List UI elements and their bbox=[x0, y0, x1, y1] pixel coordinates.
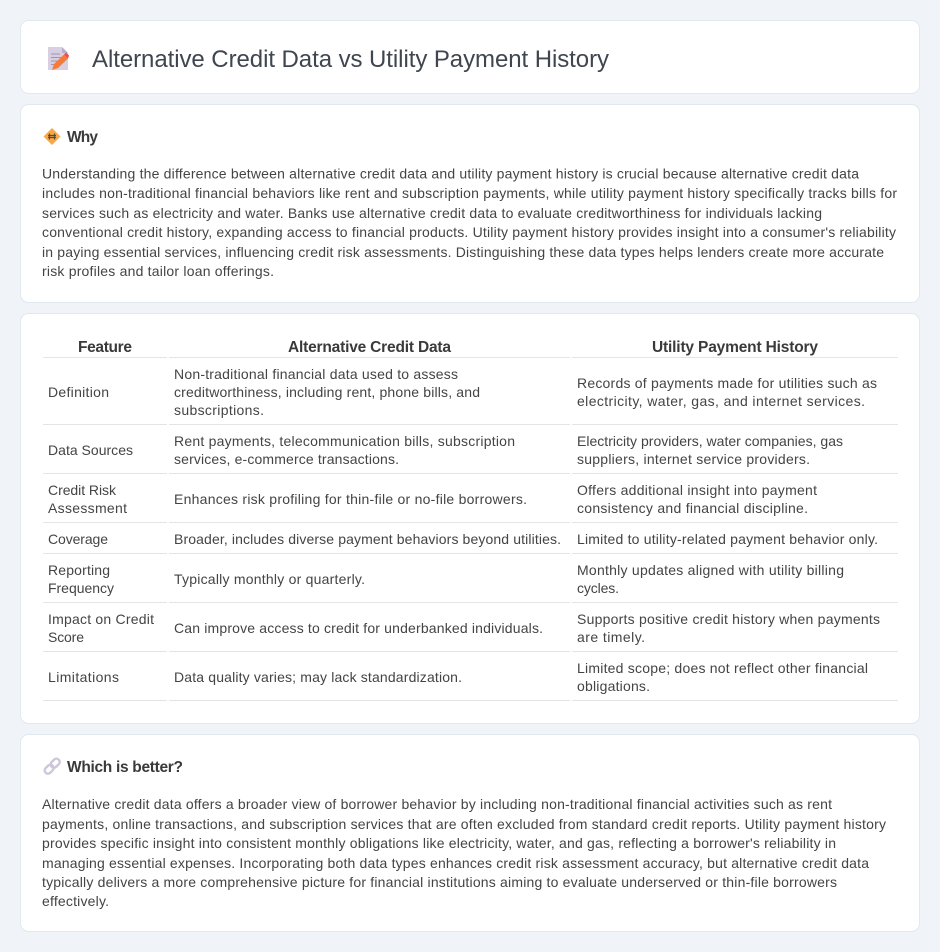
row: reporting frequency bbox=[48, 562, 844, 596]
row: definition: subscriptions. bbox=[174, 402, 264, 418]
text block: why paragraph: in paying essential services, influencing credit risk assessments. Distinguishing these data types helps lenders create more accurate bbox=[42, 244, 884, 260]
row: data sources bbox=[48, 433, 843, 467]
row: credit risk assessment: Assessment bbox=[48, 500, 127, 516]
row: impact on credit score: are timely. bbox=[577, 629, 645, 645]
row: limitations: Limited scope; does not reflect other financial bbox=[577, 660, 868, 676]
text block: which is better paragraph: payments, online transactions, and subscription services that are often excluded from standard credit reports. Utility payment history bbox=[42, 816, 886, 832]
row: impact on credit score bbox=[48, 611, 880, 645]
row: limitations: Data quality varies; may lack standardization. bbox=[174, 669, 462, 685]
row: limitations: Limitations bbox=[48, 669, 119, 685]
panel: which is better bbox=[20, 734, 920, 932]
icon: warning diamond bbox=[44, 128, 60, 145]
row: limitations: obligations. bbox=[577, 678, 650, 694]
icon: chain link bbox=[43, 757, 61, 775]
row: credit risk assessment: Offers additional insight into payment bbox=[577, 482, 817, 498]
row: coverage: Broader, includes diverse payment behaviors beyond utilities. bbox=[174, 531, 561, 547]
row: definition: Records of payments made for utilities such as bbox=[577, 375, 877, 391]
row: impact on credit score: Can improve access to credit for underbanked individuals. bbox=[174, 620, 543, 636]
panel: title header bbox=[20, 20, 920, 94]
row: coverage bbox=[48, 531, 878, 547]
text block: which is better paragraph: typically delivers a more comprehensive picture for financial institutions aiming to evaluate underserved or thin-file borrowers bbox=[42, 874, 837, 890]
row: credit risk assessment: Enhances risk profiling for thin-file or no-file borrowers. bbox=[174, 491, 527, 507]
row: definition: creditworthiness, including rent, phone bills, and bbox=[174, 384, 480, 400]
title: Alternative Credit Data vs Utility Payment History bbox=[92, 46, 609, 73]
row: reporting frequency: Typically monthly or quarterly. bbox=[174, 571, 365, 587]
row: definition: Non-traditional financial data used to assess bbox=[174, 366, 458, 382]
row: data sources: services, e-commerce transactions. bbox=[174, 451, 399, 467]
text block: why paragraph bbox=[42, 166, 897, 279]
row: data sources: Rent payments, telecommunication bills, subscription bbox=[174, 433, 515, 449]
row: limitations bbox=[48, 660, 868, 694]
row: data sources: Electricity providers, water companies, gas bbox=[577, 433, 843, 449]
text block: which is better paragraph: Alternative credit data offers a broader view of borrower behavior by including non-traditional financial activities such as rent bbox=[42, 796, 832, 812]
row: coverage: Limited to utility-related payment behavior only. bbox=[577, 531, 878, 547]
row: reporting frequency: Frequency bbox=[48, 580, 114, 596]
row: impact on credit score: Impact on Credit bbox=[48, 611, 154, 627]
row: credit risk assessment: consistency and financial discipline. bbox=[577, 500, 808, 516]
row: definition: Definition bbox=[48, 384, 109, 400]
table header row: Utility Payment History bbox=[652, 339, 818, 356]
row: coverage: Coverage bbox=[48, 531, 108, 547]
text block: why paragraph: risk profiles and tailor loan offerings. bbox=[42, 263, 274, 279]
row: credit risk assessment: Credit Risk bbox=[48, 482, 117, 498]
text block: why paragraph: conventional credit history, expanding access to financial products. Utility payment history provides insight into a consumer's reliability bbox=[42, 224, 896, 240]
row: credit risk assessment bbox=[48, 482, 817, 516]
row: definition: electricity, water, gas, and internet services. bbox=[577, 393, 865, 409]
row: data sources: suppliers, internet service providers. bbox=[577, 451, 810, 467]
panel: why bbox=[20, 104, 920, 302]
row: impact on credit score: Score bbox=[48, 629, 84, 645]
text block: which is better paragraph bbox=[42, 796, 886, 909]
row: reporting frequency: Monthly updates aligned with utility billing bbox=[577, 562, 844, 578]
icon: memo with pencil bbox=[48, 47, 69, 70]
row: reporting frequency: cycles. bbox=[577, 580, 619, 596]
heading: why: Why bbox=[67, 129, 98, 146]
text block: which is better paragraph: effectively. bbox=[42, 893, 109, 909]
text block: why paragraph: includes non-traditional financial behaviors like rent and subscription payments, while utility payment history specifically tracks bills for bbox=[42, 185, 897, 201]
row: data sources: Data Sources bbox=[48, 442, 133, 458]
text block: which is better paragraph: managing essential expenses. Incorporating both data types enhances credit risk assessment accuracy, but alternative credit data bbox=[42, 855, 869, 871]
panel: comparison table bbox=[20, 314, 920, 724]
table header row: Alternative Credit Data bbox=[288, 339, 451, 356]
table header row bbox=[78, 339, 818, 356]
heading: which is better: Which is better? bbox=[67, 759, 183, 776]
text block: why paragraph: services such as electricity and water. Banks use alternative credit data to evaluate creditworthiness for individuals lacking bbox=[42, 205, 822, 221]
row: impact on credit score: Supports positive credit history when payments bbox=[577, 611, 880, 627]
text block: which is better paragraph: provides specific insight into consistent monthly obligations like electricity, water, and gas, reflecting a borrower's reliability in bbox=[42, 835, 836, 851]
row: definition bbox=[48, 366, 877, 418]
text block: why paragraph: Understanding the difference between alternative credit data and utility payment history is crucial because alternative credit data bbox=[42, 166, 859, 182]
row: reporting frequency: Reporting bbox=[48, 562, 110, 578]
table header row: Feature bbox=[78, 339, 132, 356]
